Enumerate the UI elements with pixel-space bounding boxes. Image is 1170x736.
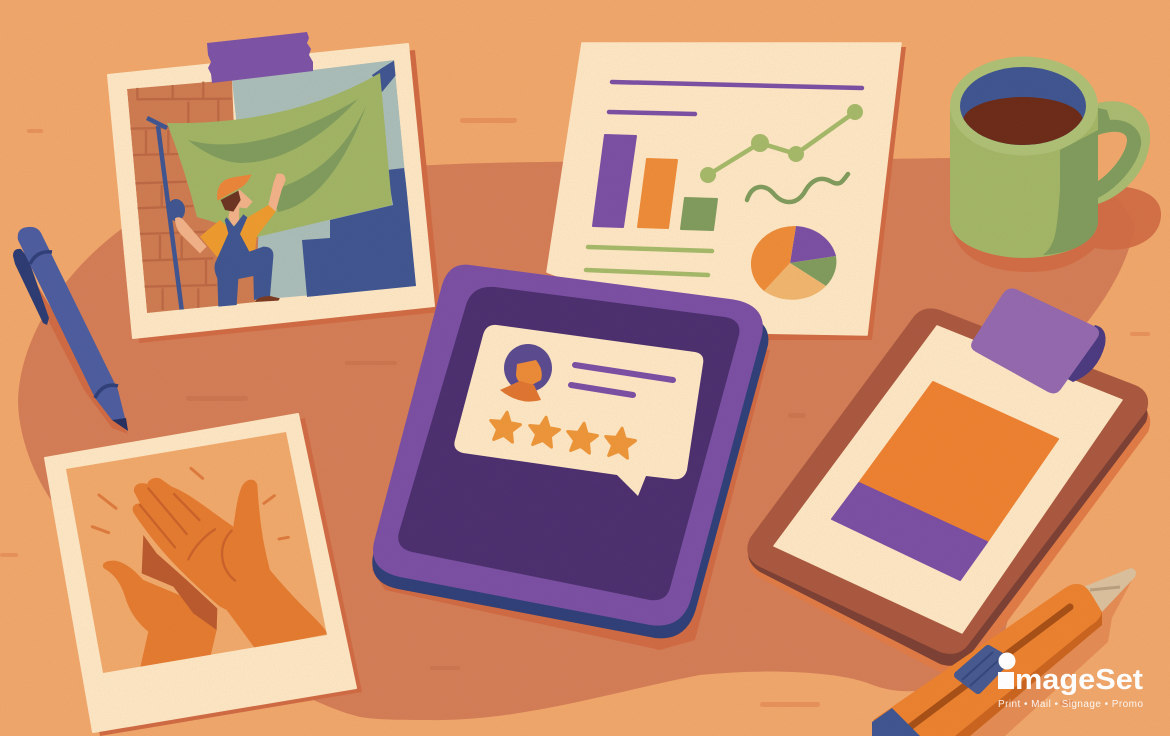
knife slot: [910, 607, 1070, 727]
blade score: [1090, 587, 1120, 590]
review bubble: [454, 325, 703, 496]
polaroid frame: [45, 414, 356, 732]
clapping hands polaroid: [45, 414, 362, 736]
washi tape: [207, 32, 313, 83]
bar chart: [593, 135, 717, 230]
desk mat shape: [18, 158, 1135, 720]
pen tip: [112, 418, 128, 431]
worker overalls: [215, 214, 273, 307]
pole: [147, 118, 182, 312]
report sheet: [547, 43, 906, 340]
worker arms: [175, 173, 286, 253]
polaroid frame: [108, 44, 434, 338]
line chart: [700, 104, 863, 183]
worker shirt: [200, 205, 276, 257]
mug rim: [950, 56, 1098, 156]
tablet screen: [398, 287, 739, 600]
knife body underside: [935, 612, 1102, 736]
avatar circle: [504, 344, 552, 392]
pole knot: [170, 199, 185, 221]
squiggle line: [747, 174, 848, 202]
polaroid: banner installer: [108, 32, 441, 343]
coffee mug: [950, 56, 1161, 272]
hand shadow: [142, 535, 217, 630]
text lines: [586, 247, 712, 275]
sky wall: [232, 60, 416, 300]
brick lines: [131, 82, 232, 310]
avatar shoulders: [500, 381, 541, 402]
logo dot: [998, 652, 1016, 670]
knife shadow: [930, 580, 1132, 736]
utility knife: [872, 568, 1136, 736]
pen: [13, 227, 128, 434]
tablet edge: [372, 275, 768, 638]
knife end cap: [872, 708, 920, 736]
knife blade: [1083, 568, 1136, 612]
clipboard paper: [774, 326, 1122, 633]
mug side shade: [1043, 130, 1098, 255]
banner fold 1: [188, 99, 358, 163]
tablet: [372, 265, 770, 650]
worker boot: [255, 296, 280, 302]
coffee: [963, 97, 1083, 145]
lower hand: [103, 561, 217, 668]
orange image block: [859, 382, 1058, 542]
polaroid shadow: [52, 418, 362, 736]
purple caption block: [832, 483, 987, 580]
pen shadow: [20, 257, 128, 434]
pen barrel: [18, 227, 128, 430]
knife slider: [958, 649, 1007, 690]
mug handle: [1098, 101, 1150, 204]
logo tagline: Print • Mail • Signage • Promo: [998, 699, 1143, 710]
clipboard: [747, 288, 1150, 675]
pen bands: [30, 252, 118, 398]
polaroid shadow: [114, 50, 441, 343]
clipboard board: [747, 308, 1148, 654]
desk speckles: [0, 118, 1150, 707]
banner fold 2: [272, 106, 366, 212]
logo wordmark: mageSet: [1015, 664, 1143, 696]
clap sparks: [92, 468, 288, 539]
worker figure: [175, 173, 286, 307]
clipboard edge: [748, 318, 1148, 666]
heading lines: [609, 82, 862, 114]
avatar head: [516, 360, 542, 386]
mug interior: [960, 67, 1086, 145]
clipboard shadow: [749, 322, 1150, 675]
knife body: [873, 584, 1102, 736]
pen clip: [13, 249, 49, 325]
worker face: [228, 189, 253, 227]
banner: [167, 73, 392, 237]
palm creases: [140, 488, 235, 581]
logo: imageSet: [998, 652, 1143, 710]
worker cap: [217, 174, 252, 201]
sheet paper: [547, 43, 901, 335]
photo background: [66, 432, 327, 673]
logo i stem: [998, 672, 1014, 689]
pie chart: [751, 226, 836, 300]
upper hand: [133, 478, 327, 648]
mug body: [950, 106, 1098, 258]
photo scene: [127, 60, 420, 313]
review lines: [571, 365, 673, 395]
sheet shadow: [553, 47, 906, 340]
mug handle shade: [1098, 108, 1141, 198]
tablet frame: [373, 265, 763, 626]
purple clip tape: [971, 288, 1099, 393]
mug shadow: [950, 185, 1161, 272]
banner hook: [372, 60, 396, 92]
worker hair: [221, 191, 241, 212]
tape curl: [1060, 325, 1106, 382]
hands artwork: [92, 468, 327, 668]
tablet drop shadow: [372, 300, 770, 650]
bubble: [454, 325, 703, 496]
brick wall: [127, 80, 260, 313]
star rating: [488, 410, 637, 459]
navy building: [302, 168, 420, 297]
